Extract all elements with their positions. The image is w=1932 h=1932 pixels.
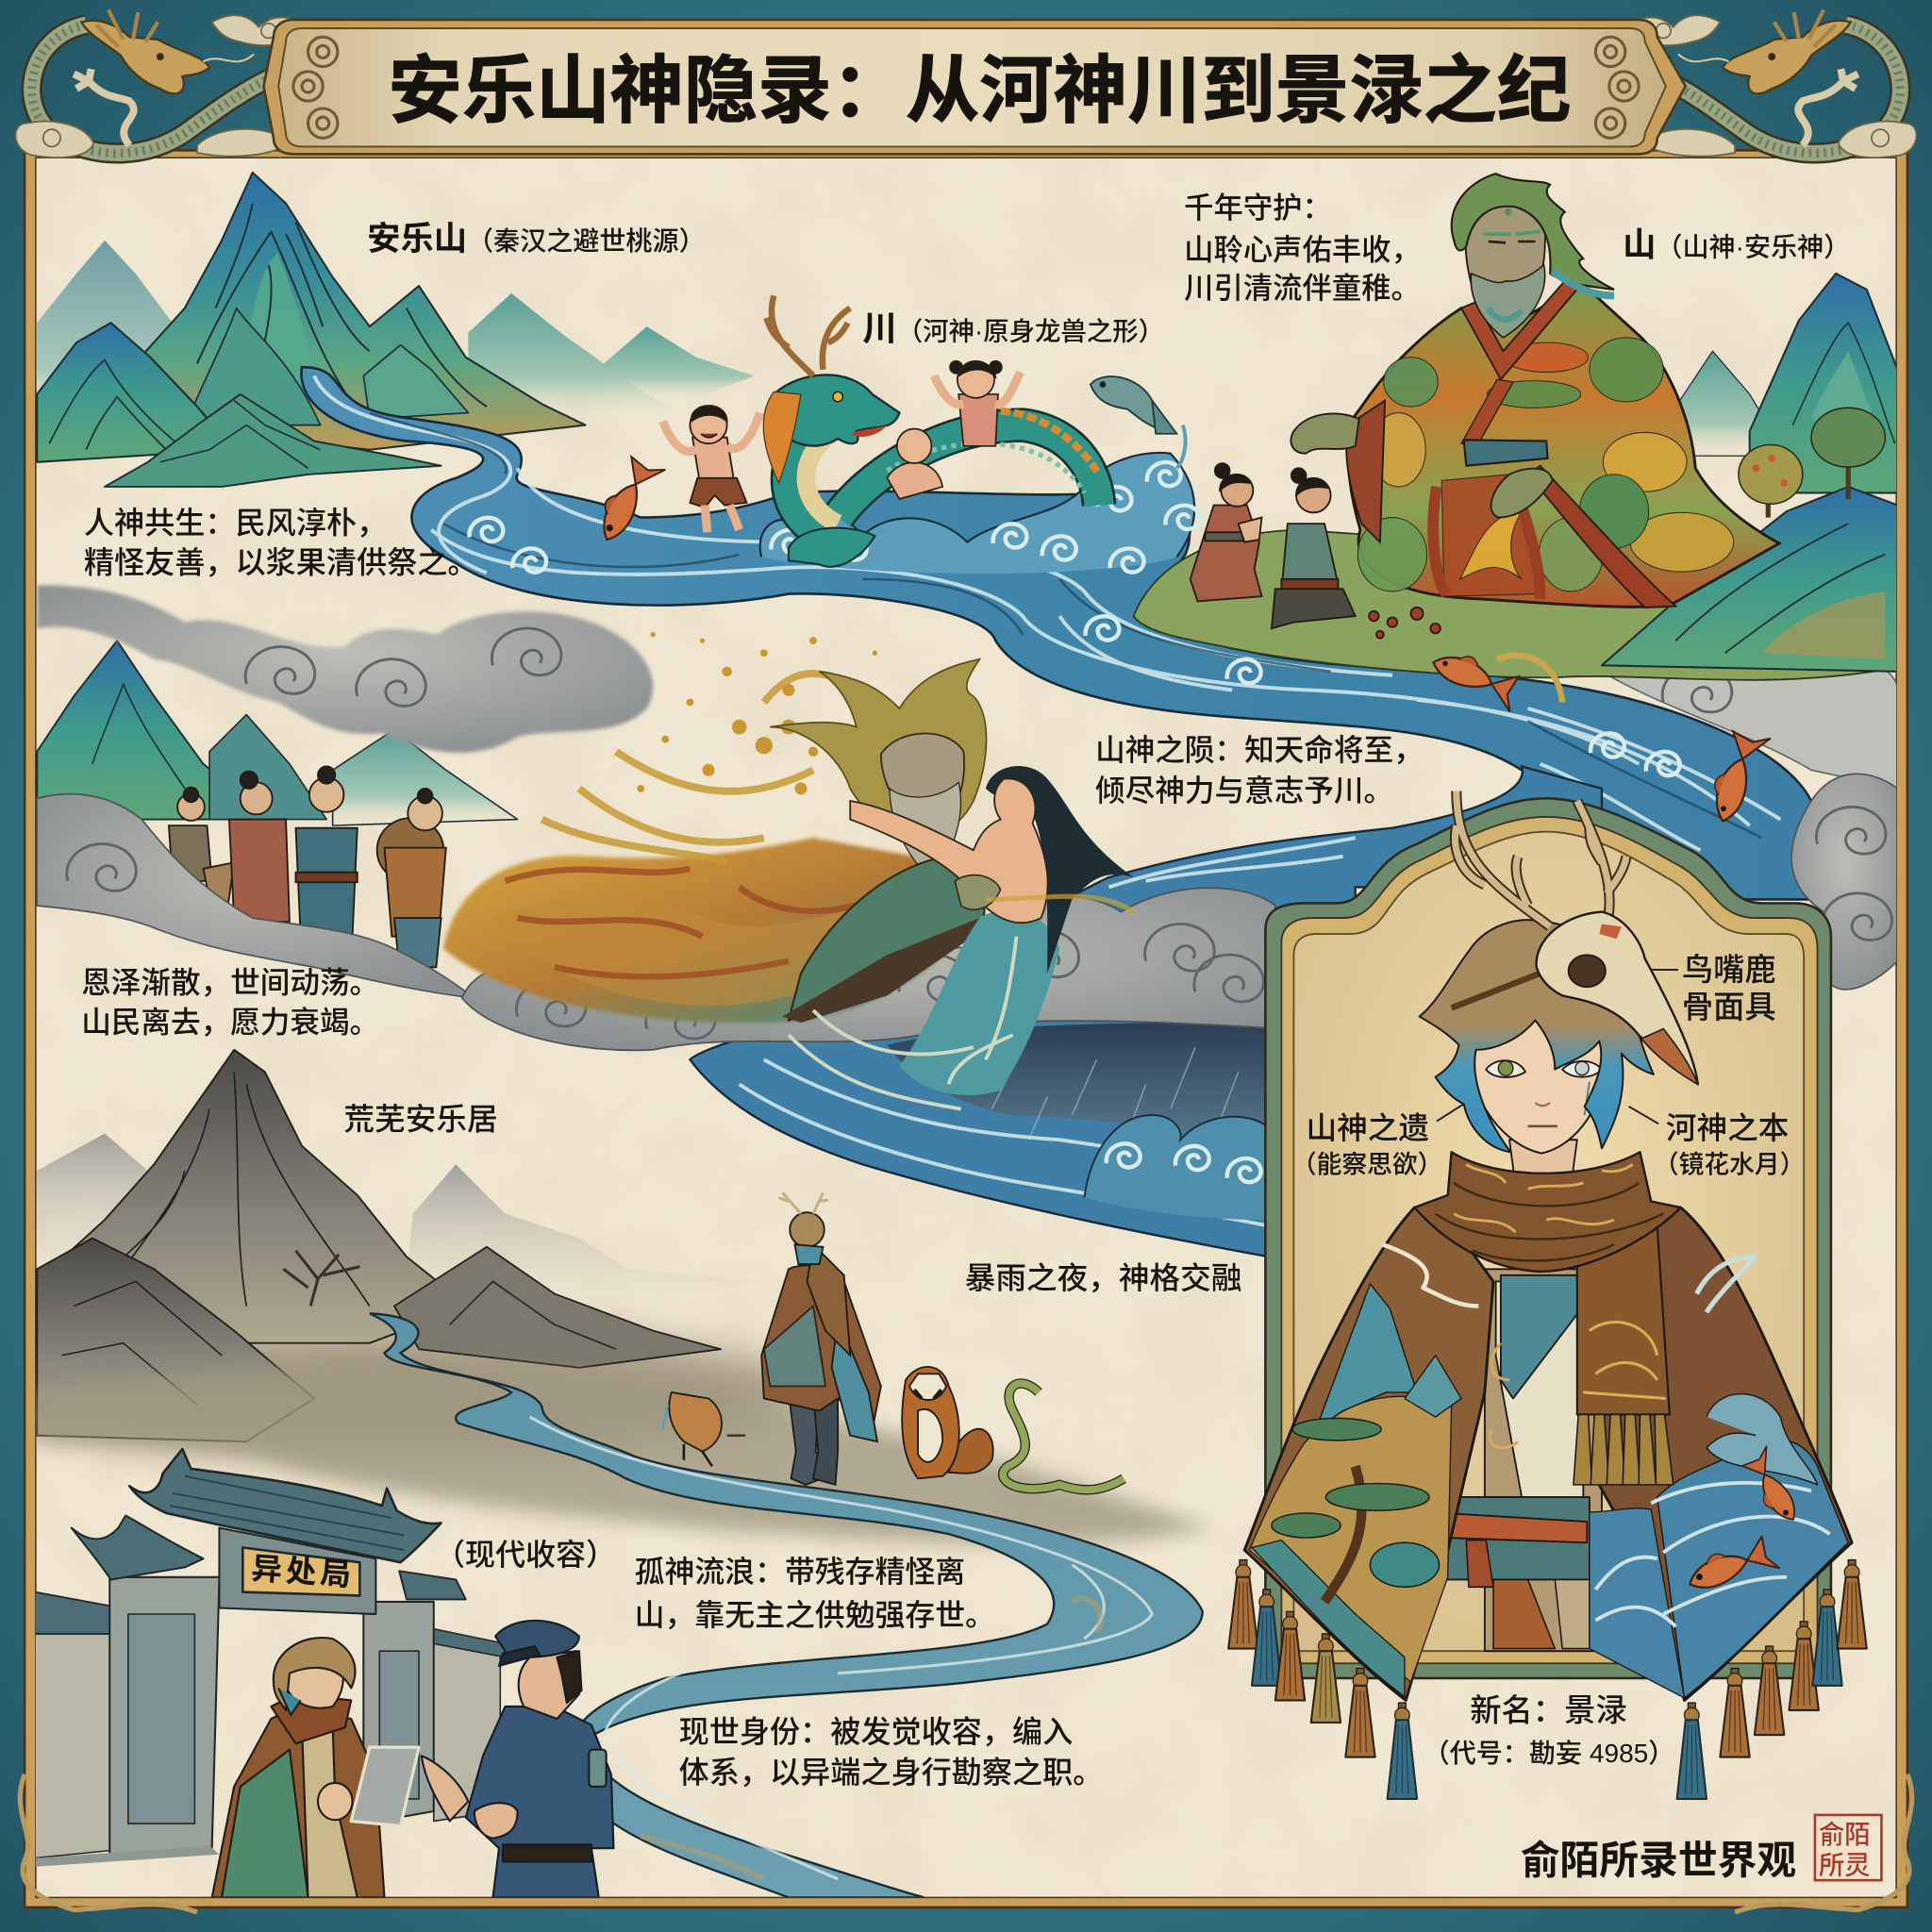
callout: 鸟嘴鹿骨面具: 鸟嘴鹿 <box>1682 954 1776 989</box>
goddess body and arm <box>850 778 1048 923</box>
seal: 所灵 <box>1819 1851 1871 1880</box>
caption: 新名 景渌: 新名：景渌 <box>1470 1694 1627 1729</box>
text: 千年守护: 川引清流伴童稚。 <box>1184 272 1421 305</box>
top-left mountains: 安乐山 <box>37 173 754 487</box>
signature: 俞陌所录世界观 <box>1521 1839 1796 1883</box>
child left, with fish <box>591 406 760 549</box>
text: 山神之陨: 倾尽神力与意志予川。 <box>1095 774 1393 808</box>
portrait frame arch <box>1265 798 1831 1678</box>
text: 现世身份: 现世身份：被发觉收容，编入 <box>679 1715 1073 1749</box>
持平板的景渌 <box>212 1638 419 1897</box>
children riding dragon <box>887 361 1020 499</box>
robe body <box>1347 283 1779 607</box>
beaked deer skull mask <box>1537 912 1698 1084</box>
plaque text: 异处局: 异处局 <box>250 1550 356 1592</box>
callout: 鸟嘴鹿骨面具: 骨面具 <box>1682 991 1776 1025</box>
hair <box>1452 174 1614 290</box>
text: 恩泽渐散 <box>81 966 379 1040</box>
tassels <box>1228 1560 1258 1649</box>
text: 孤神流浪: 山，靠无主之供勉强存世。 <box>635 1598 995 1632</box>
label: 山: 山（山神·安乐神） <box>1623 227 1850 264</box>
text: 孤神流浪: 孤神流浪：带残存精怪离 <box>635 1555 965 1589</box>
lower grey mountains: 荒芜 <box>0 1050 813 1457</box>
scarf <box>1414 1152 1681 1272</box>
inner robe <box>1485 1269 1602 1651</box>
flaming hair <box>770 659 987 837</box>
text: 人神共生 <box>84 507 477 579</box>
callout: 河神之本 <box>1629 1107 1805 1178</box>
callout: 山神之遗: （能察思欲） <box>1291 1150 1442 1178</box>
callout: 鸟嘴鹿骨面具 <box>1651 954 1776 1025</box>
text: 恩泽渐散: 恩泽渐散，世间动荡。 <box>81 966 379 1000</box>
text: 恩泽渐散: 山民离去，愿力衰竭。 <box>81 1006 379 1040</box>
text: 现世身份: 体系，以异端之身行勘察之职。 <box>679 1756 1103 1790</box>
text: 山神之陨 <box>1095 733 1424 808</box>
label: 安乐山: 安乐山（秦汉之避世桃源） <box>367 221 706 258</box>
fruit trees <box>1739 408 1885 518</box>
robe landscape patches <box>1357 338 1734 596</box>
text: 千年守护 <box>1184 192 1421 305</box>
callout: 山神之遗 <box>1291 1104 1464 1178</box>
leaping green fish <box>1091 376 1186 468</box>
mountain god fading into golden dust, embracing river goddess <box>443 632 1134 1109</box>
title: 安乐山神隐录：从河神川到景渌之纪 <box>388 49 1571 132</box>
brown cape centre strip patterns <box>1490 1343 1518 1448</box>
scarf tail <box>1577 1226 1670 1414</box>
eyes, nose, mouth <box>1486 1060 1602 1126</box>
corner dragon top-left <box>16 9 303 158</box>
orange fish on the river <box>1426 646 1771 827</box>
label: 荒芜安乐居: 荒芜安乐居 <box>343 1102 498 1137</box>
goddess hair <box>986 766 1134 974</box>
caption: 新名 景渌 <box>1424 1694 1674 1768</box>
mountain god 山 in landscape robe <box>1291 174 1779 608</box>
right side clouds <box>1602 656 1897 990</box>
main river: blue flow from the mountain to the right <box>301 367 1819 899</box>
callout: 山神之遗: 山神之遗 <box>1306 1110 1429 1145</box>
grass bank <box>1134 530 1873 680</box>
grey clouds upper band <box>37 585 653 753</box>
gold fish spray <box>1497 656 1562 702</box>
right mountains behind god <box>1602 274 1897 672</box>
goddess flowing lower body <box>899 909 1059 1095</box>
text: 人神共生: 人神共生：民风淳朴， <box>84 507 387 541</box>
label: 现代收容: （现代收容） <box>435 1538 616 1572</box>
text: 现世身份 <box>679 1715 1103 1790</box>
wandering god with spirits <box>663 1192 1124 1490</box>
seal: 俞陌 <box>1819 1820 1871 1849</box>
faded river lower <box>370 1313 1203 1897</box>
god robe <box>789 857 984 1020</box>
head <box>1466 197 1545 302</box>
hands <box>1291 413 1359 454</box>
title plaque <box>264 20 1686 154</box>
label: 川: 川（河神·原身龙兽之形） <box>862 308 1164 347</box>
text: 暴雨之夜: 暴雨之夜，神格交融 <box>965 1260 1241 1295</box>
dry land wash <box>37 1366 1214 1543</box>
seal <box>1815 1815 1881 1880</box>
caption: 新名 景渌: （代号：勘妄 4985） <box>1424 1739 1674 1768</box>
corner dragon top-right <box>1629 9 1916 158</box>
收容官员 <box>422 1621 613 1897</box>
callout: 河神之本: 河神之本 <box>1666 1110 1789 1145</box>
text: 孤神流浪 <box>635 1555 995 1632</box>
neck and face <box>1509 1140 1577 1185</box>
text: 山神之陨: 山神之陨：知天命将至， <box>1095 733 1424 767</box>
hair band <box>1452 969 1553 1008</box>
callout: 河神之本: （镜花水月） <box>1654 1150 1805 1178</box>
景渌 portrait figure <box>1228 791 1867 1799</box>
text: 人神共生: 精怪友善，以浆果清供祭之。 <box>84 545 477 579</box>
collar band and sash <box>1461 281 1582 379</box>
beard <box>1471 265 1545 338</box>
text: 千年守护: 山聆心声佑丰收， <box>1184 234 1421 267</box>
god face <box>880 732 965 796</box>
mid-left mountains in decline <box>37 641 518 825</box>
river continuation and storm <box>690 766 1602 1257</box>
dragon form of 川 <box>763 295 1099 567</box>
villagers leaving <box>169 766 446 967</box>
grey clouds lower band <box>37 794 1281 1050</box>
antlers <box>1456 791 1626 926</box>
cape left half: mountains <box>1244 1208 1493 1700</box>
kneeling children offering to 山 <box>1191 463 1441 639</box>
cape right half: waves <box>1595 1208 1852 1700</box>
text: 千年守护: 千年守护： <box>1184 192 1332 225</box>
gate 异处局 <box>35 1449 506 1867</box>
bottom corner gold dragons <box>20 1774 1912 1912</box>
hair, brown fading to blue <box>1420 920 1654 1152</box>
